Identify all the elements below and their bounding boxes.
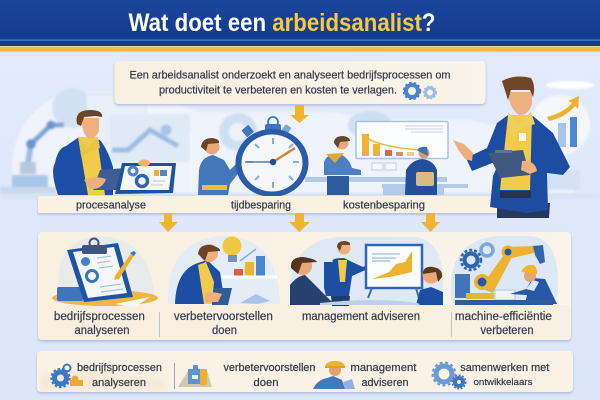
arrow: to second item bbox=[289, 213, 310, 232]
label: kostenbesparing: kostenbesparing bbox=[343, 200, 425, 212]
illustration: clipboard analysis bbox=[52, 236, 158, 307]
panel: summary strip bbox=[37, 351, 573, 392]
text: management adviseren: adviseren bbox=[362, 377, 408, 389]
illustration: improvement proposals bbox=[168, 236, 280, 305]
caption: bedrijfsprocessen analyseren: analyseren bbox=[74, 325, 130, 337]
tablet bbox=[115, 160, 176, 194]
arrow: to first item bbox=[159, 213, 178, 232]
icon: gears in intro box bbox=[404, 83, 436, 99]
caption: machine-efficiëntie verbeteren: machine-efficiëntie bbox=[455, 311, 552, 323]
text: samenwerken met ontwikkelaars: ontwikkelaars bbox=[474, 377, 533, 388]
text: verbetervoorstellen doen: doen bbox=[254, 377, 278, 389]
caption: bedrijfsprocessen analyseren: bedrijfsprocessen bbox=[54, 311, 145, 323]
stopwatch bbox=[236, 117, 308, 197]
background factory illustration bbox=[0, 81, 600, 196]
figure: seated engineer bbox=[324, 136, 361, 195]
illustration: machine efficiency bbox=[451, 236, 558, 305]
text: bedrijfsprocessen analyseren: analyseren bbox=[92, 377, 146, 389]
intro text: productiviteit te verbeteren en kosten te verlagen. bbox=[159, 84, 397, 96]
figure: analyst with clipboard and tablet bbox=[53, 110, 176, 195]
header banner bbox=[0, 0, 600, 52]
intro text box bbox=[114, 61, 486, 104]
caption: management adviseren: management adviseren bbox=[302, 311, 420, 323]
title: Wat doet een arbeidsanalist? bbox=[128, 9, 436, 37]
text: management adviseren: management bbox=[350, 362, 417, 374]
label: tijdbesparing: tijdbesparing bbox=[231, 200, 291, 212]
caption: verbetervoorstellen doen: verbetervoorstellen bbox=[174, 311, 273, 323]
figure: seated colleague bbox=[405, 147, 437, 195]
figure: main analyst presenting bbox=[453, 77, 570, 218]
text: bedrijfsprocessen analyseren: bedrijfsprocessen bbox=[77, 362, 162, 374]
icon: process gear and puzzle bbox=[51, 364, 83, 387]
panel: tasks bbox=[38, 232, 571, 340]
growth arrow and bars bbox=[547, 96, 579, 147]
intro text: Een arbeidsanalist onderzoekt en analyseert bedrijfsprocessen om bbox=[129, 70, 450, 82]
label: procesanalyse: procesanalyse bbox=[76, 200, 146, 212]
arrow: intro to timer bbox=[290, 105, 309, 123]
arrow: to third item bbox=[421, 213, 440, 232]
caption: machine-efficiëntie verbeteren: verbeteren bbox=[480, 325, 534, 337]
caption: verbetervoorstellen doen: doen bbox=[212, 325, 237, 337]
label strip bbox=[38, 196, 498, 213]
text: verbetervoorstellen doen: verbetervoorstellen bbox=[223, 362, 315, 374]
icon: documents and bars bbox=[178, 365, 212, 387]
text: samenwerken met ontwikkelaars: samenwerken met bbox=[460, 362, 550, 374]
icon: engineer with helmet bbox=[313, 361, 355, 389]
illustration: advising management bbox=[290, 237, 443, 306]
desk bbox=[305, 177, 468, 195]
figure: worker at stopwatch bbox=[198, 138, 243, 195]
icon: two gears bbox=[432, 362, 466, 389]
chart screen bbox=[356, 122, 448, 170]
